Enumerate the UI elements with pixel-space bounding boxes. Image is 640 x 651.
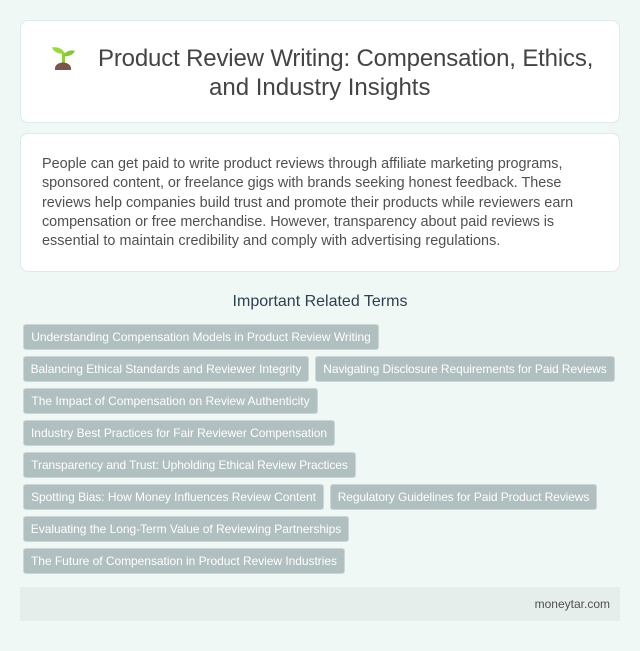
tag: Spotting Bias: How Money Influences Review Content bbox=[31, 490, 316, 504]
tag: Industry Best Practices for Fair Reviewer Compensation bbox=[31, 426, 327, 440]
tag bbox=[23, 516, 349, 542]
tag bbox=[23, 356, 309, 382]
header card bbox=[20, 20, 620, 123]
tag bbox=[23, 484, 324, 510]
summary paragraph bbox=[42, 156, 573, 249]
tag: Transparency and Trust: Upholding Ethical Review Practices bbox=[31, 458, 348, 472]
tag bbox=[330, 484, 597, 510]
tag bbox=[23, 324, 379, 350]
summary paragraph: People can get paid to write product reviews through affiliate marketing programs, bbox=[42, 156, 562, 172]
tag bbox=[23, 420, 335, 446]
tag: Understanding Compensation Models in Product Review Writing bbox=[31, 330, 371, 344]
icon: sprout bbox=[52, 47, 75, 70]
tag: Balancing Ethical Standards and Reviewer Integrity bbox=[31, 362, 301, 376]
tag bbox=[315, 356, 615, 382]
tag: Navigating Disclosure Requirements for Paid Reviews bbox=[323, 362, 607, 376]
tag bbox=[23, 452, 356, 478]
title: and Industry Insights bbox=[209, 74, 430, 101]
summary paragraph: reviews help companies build trust and promote their products while reviewers earn bbox=[42, 194, 573, 210]
tag: The Future of Compensation in Product Review Industries bbox=[31, 554, 337, 568]
tag bbox=[23, 548, 345, 574]
summary paragraph: essential to maintain credibility and comply with advertising regulations. bbox=[42, 233, 500, 249]
tag: Evaluating the Long-Term Value of Reviewing Partnerships bbox=[31, 522, 341, 536]
title: Product Review Writing: Compensation, Ethics, bbox=[98, 45, 593, 72]
tag list bbox=[23, 324, 615, 574]
section heading: Important Related Terms bbox=[233, 293, 407, 310]
tag bbox=[23, 388, 318, 414]
summary card bbox=[20, 133, 620, 272]
title bbox=[98, 45, 593, 101]
footer bar bbox=[20, 587, 620, 621]
tag: Regulatory Guidelines for Paid Product Reviews bbox=[338, 490, 589, 504]
tag: The Impact of Compensation on Review Authenticity bbox=[31, 394, 310, 408]
footer source: moneytar.com bbox=[535, 597, 610, 611]
summary paragraph: sponsored content, or freelance gigs with brands seeking honest feedback. These bbox=[42, 175, 561, 191]
summary paragraph: compensation or free merchandise. However, transparency about paid reviews is bbox=[42, 214, 554, 230]
